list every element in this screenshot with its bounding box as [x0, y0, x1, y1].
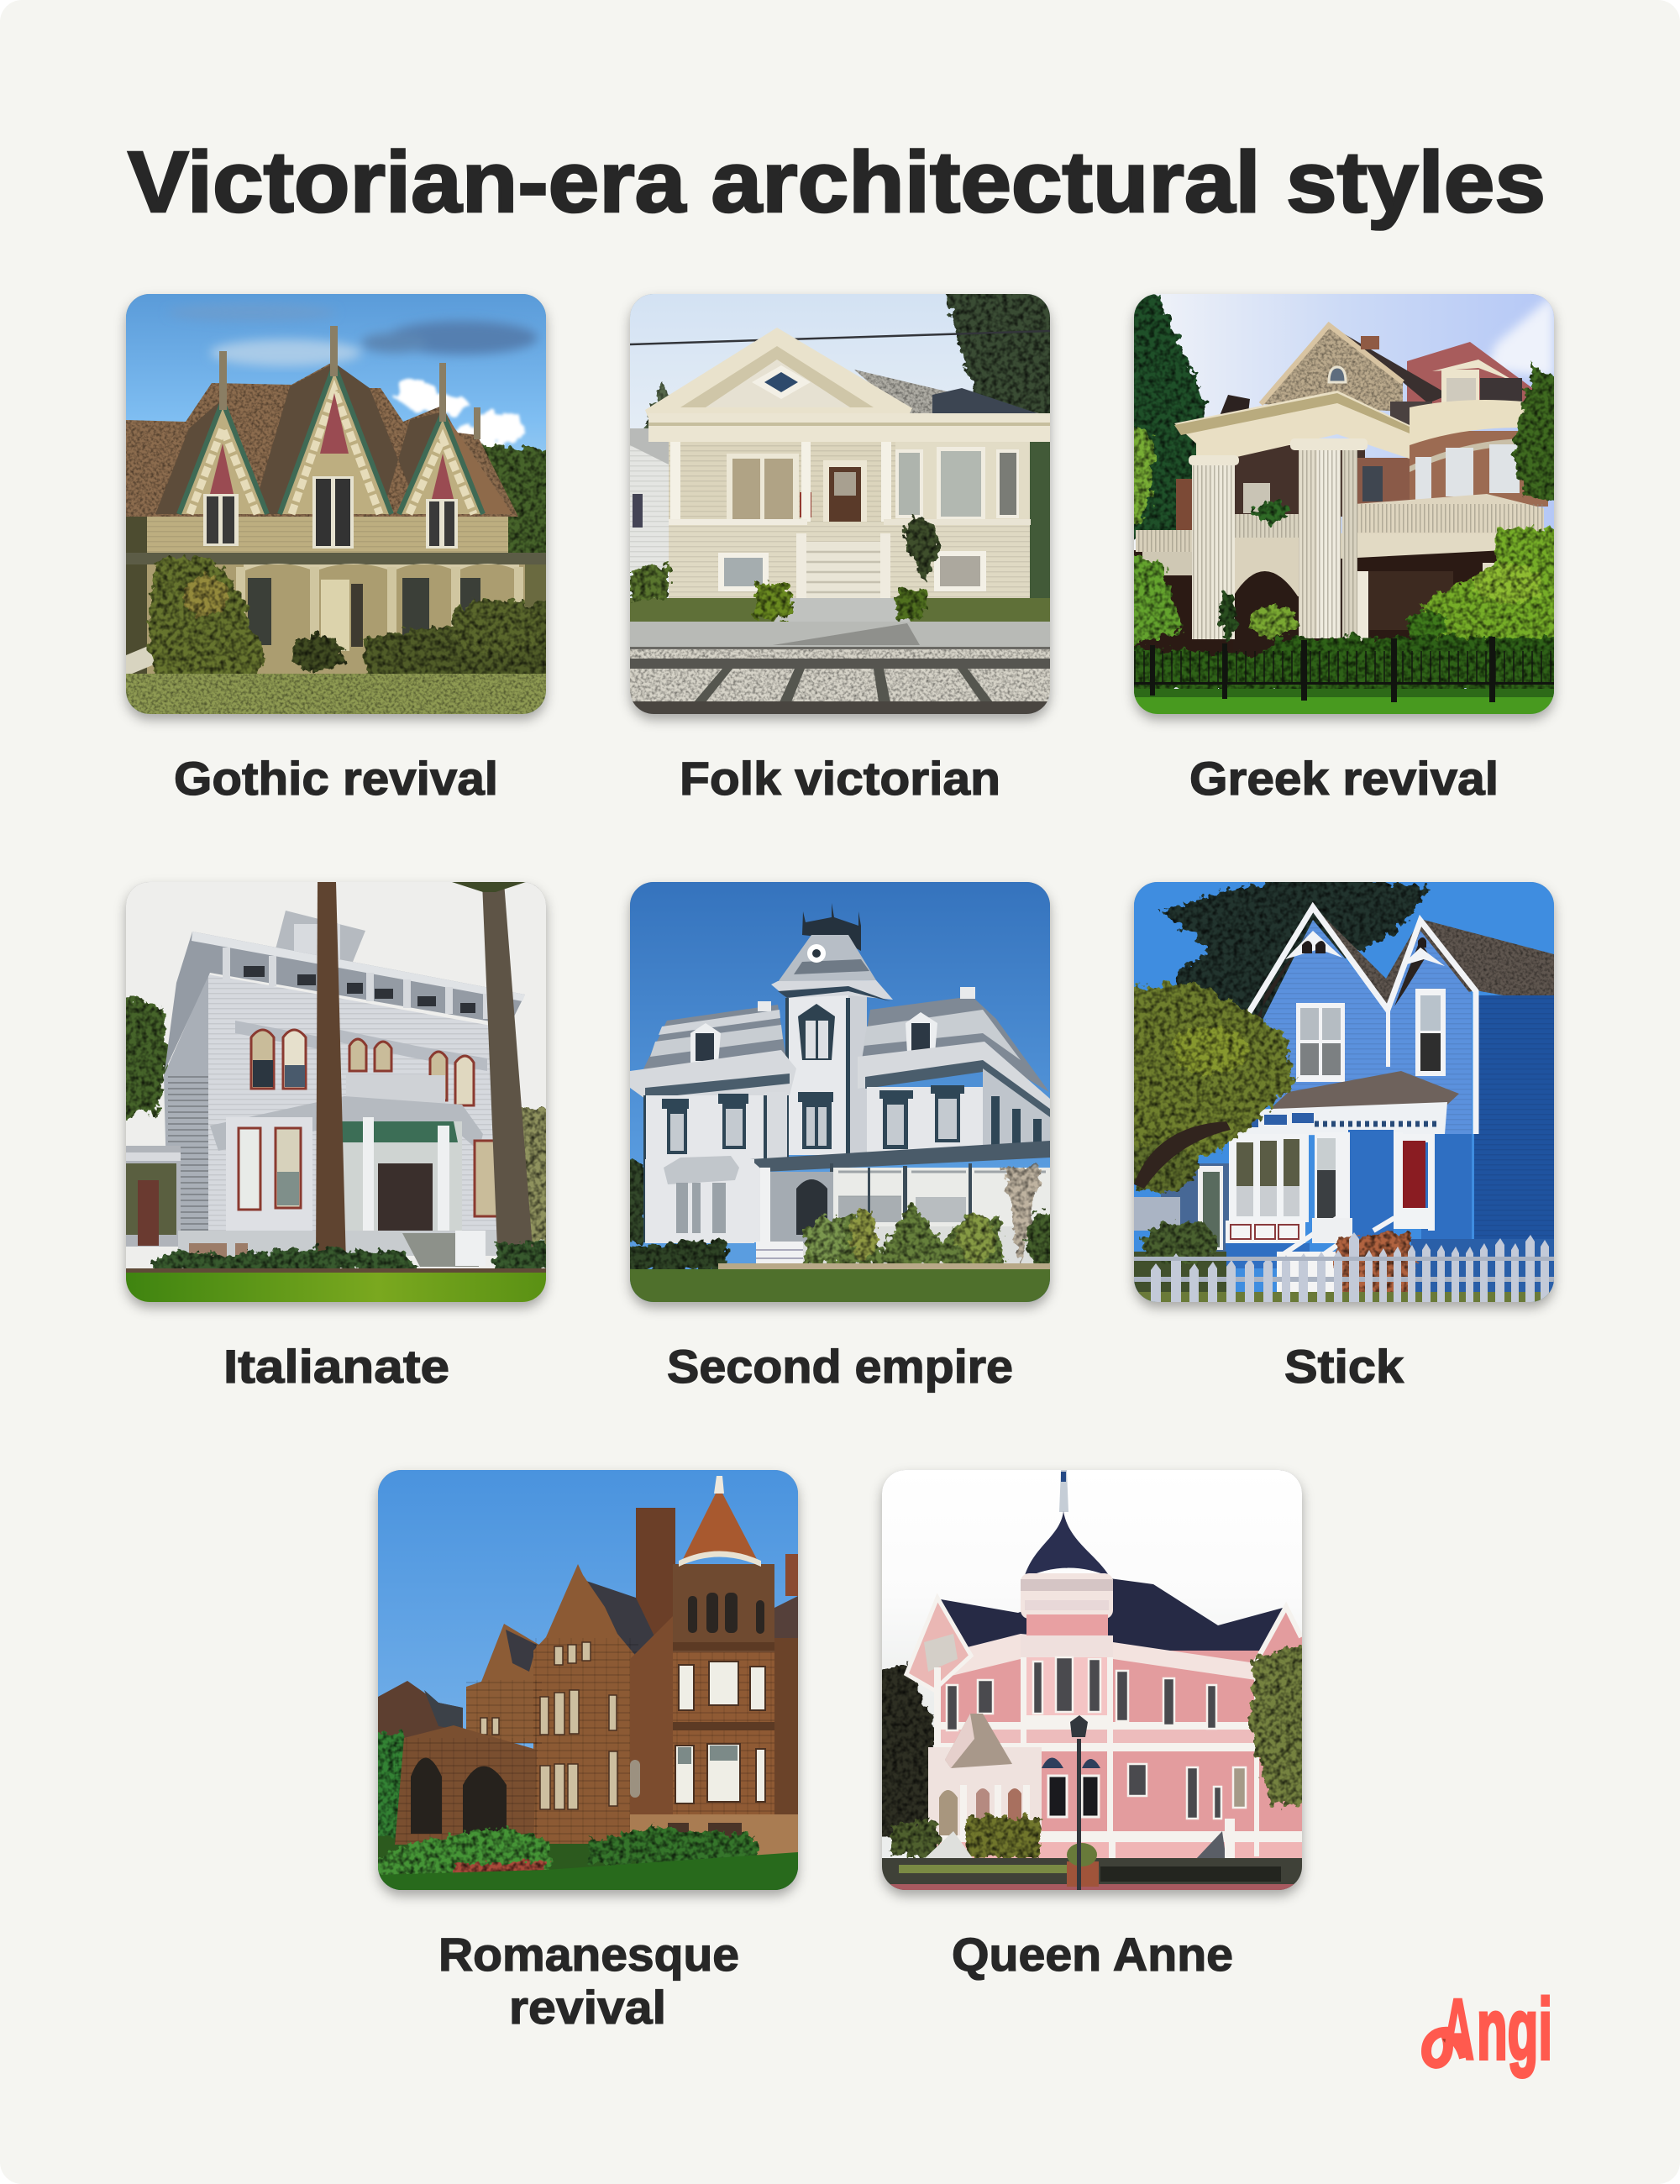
conical roof	[681, 1487, 759, 1562]
tower	[787, 991, 848, 1155]
upper windows	[235, 1021, 487, 1105]
label: Romanesque revival	[438, 1928, 739, 2034]
iron fence	[1134, 637, 1554, 702]
tree left	[1126, 290, 1205, 542]
porch body	[1348, 1130, 1394, 1243]
label: Greek revival: Greek revival	[1189, 752, 1499, 805]
ground fill	[378, 1831, 798, 1890]
label: Romanesque revival: Romanesque	[438, 1928, 739, 1981]
panel: Stick photo	[1121, 874, 1554, 1302]
stair rails	[1281, 1216, 1394, 1273]
main roof	[126, 362, 518, 517]
lower wall	[669, 522, 1030, 599]
hedges	[756, 584, 926, 620]
gable vent	[752, 365, 811, 399]
entablature	[1174, 391, 1410, 466]
flowers	[1336, 1231, 1415, 1294]
lawn	[126, 674, 546, 714]
logo: Angi	[1426, 1981, 1552, 2077]
label: Romanesque revival: revival	[509, 1981, 666, 2034]
background building	[378, 1681, 463, 1747]
upper windows	[1296, 989, 1446, 1082]
hillside	[481, 444, 546, 553]
neighbour house	[630, 445, 669, 571]
entablature	[648, 413, 1050, 442]
main windows	[480, 1642, 617, 1809]
columns	[1192, 441, 1495, 643]
balconies	[1136, 494, 1544, 552]
rose bush	[903, 517, 939, 584]
left tree	[370, 1732, 404, 1840]
main roof	[941, 1578, 1286, 1663]
panel: Second empire photo	[622, 882, 1060, 1302]
annex	[126, 1146, 181, 1247]
side wall	[164, 974, 210, 1252]
lawn	[378, 1852, 798, 1890]
label: Folk victorian: Folk victorian	[680, 752, 1000, 805]
main gable	[533, 1564, 638, 1844]
clouds	[396, 380, 525, 447]
balcony	[346, 1075, 445, 1107]
tower windows	[675, 1662, 765, 1803]
upper walls	[669, 442, 895, 522]
cupola	[276, 911, 365, 962]
foliage	[1126, 365, 1562, 647]
upper gable	[1407, 342, 1538, 407]
light blue walls	[1235, 920, 1472, 1134]
picket fence	[1134, 1232, 1554, 1302]
planter	[1067, 1861, 1099, 1887]
left side wall	[126, 517, 147, 674]
gable	[645, 328, 912, 418]
backing behind fence	[1411, 1239, 1554, 1294]
tower upper windows	[688, 1593, 764, 1634]
lower storey	[1134, 550, 1554, 668]
tower mansard	[778, 935, 876, 982]
porch windows	[833, 1168, 1050, 1226]
cornices	[630, 1050, 796, 1099]
porch base wall	[787, 1222, 1050, 1268]
finials	[219, 326, 480, 439]
tower	[673, 1564, 774, 1854]
windows	[947, 1657, 1221, 1819]
gables	[179, 365, 483, 514]
label: Queen Anne: Queen Anne	[952, 1928, 1233, 1981]
attic windows	[244, 966, 475, 1013]
label: Italianate: Italianate	[223, 1340, 449, 1393]
right background trees	[512, 1109, 554, 1243]
logo: Angi: A	[1441, 1981, 1474, 2077]
red door	[1403, 1141, 1425, 1208]
base and stairs	[178, 1231, 510, 1256]
porch	[147, 554, 525, 674]
dormer	[1441, 370, 1479, 410]
panel: Italianate photo	[118, 882, 554, 1302]
wing windows	[1415, 444, 1520, 501]
porch	[340, 1121, 462, 1231]
rail bed	[630, 647, 1050, 702]
plants	[151, 1243, 554, 1273]
windows	[662, 1085, 1042, 1154]
side roof	[854, 370, 1039, 413]
panel: Romanesque revival photo	[370, 1470, 802, 1890]
stone base	[630, 1814, 798, 1856]
shrubs	[370, 1827, 756, 1877]
conifer	[1159, 874, 1432, 1033]
background trees	[874, 1663, 937, 1840]
panel: Gothic revival photo	[126, 294, 554, 714]
shrubs	[622, 1168, 1060, 1273]
palm left	[118, 995, 168, 1126]
dormers	[690, 1012, 937, 1063]
bands	[934, 1715, 1302, 1842]
porch	[395, 1725, 537, 1845]
lawn	[126, 1271, 546, 1302]
finial	[1059, 1470, 1068, 1512]
right wall	[630, 1613, 676, 1844]
shrubs	[148, 557, 554, 689]
left tree	[1121, 983, 1294, 1265]
lawn	[630, 598, 1050, 623]
entry	[764, 1172, 833, 1243]
panel: Queen Anne photo	[874, 1470, 1310, 1890]
shrubs	[892, 1816, 1040, 1858]
label: Gothic revival: Gothic revival	[174, 752, 498, 805]
windows	[727, 447, 1019, 521]
brick wing	[1410, 431, 1548, 507]
side building	[1161, 1163, 1232, 1264]
title: Victorian-era architectural styles	[128, 134, 1546, 230]
facade	[208, 974, 510, 1239]
label: Stick: Stick	[1284, 1340, 1404, 1393]
columns	[670, 442, 891, 522]
dark roofs	[586, 1581, 655, 1659]
door	[823, 460, 867, 522]
lamp post	[1070, 1715, 1088, 1890]
panel: Greek revival photo	[1126, 290, 1562, 714]
tower crest	[802, 903, 861, 951]
lawn	[630, 1269, 1050, 1302]
porch rail	[1403, 1208, 1435, 1229]
panels	[1226, 1221, 1305, 1243]
entry porch	[928, 1747, 1042, 1835]
logo: Angi: ngi	[1477, 1981, 1552, 2077]
ground	[882, 1858, 1302, 1890]
hedge	[1126, 637, 1562, 693]
lawn	[1134, 1292, 1554, 1302]
left gable	[906, 1598, 971, 1690]
portico interior	[1222, 445, 1365, 517]
lower bay	[645, 1159, 754, 1243]
white barge boards	[1239, 907, 1476, 1134]
right tree	[1252, 1642, 1310, 1806]
palm trunks	[316, 882, 346, 1264]
tower	[1024, 1511, 1110, 1578]
right mansard	[861, 996, 1049, 1092]
bay windows	[226, 1117, 312, 1231]
chimneys	[636, 1508, 675, 1638]
porch frieze	[1231, 1102, 1447, 1136]
gable windows	[203, 476, 458, 549]
porch roof	[750, 1141, 1050, 1172]
side steps	[1194, 1831, 1226, 1861]
lawn	[1134, 690, 1554, 714]
left mansard	[639, 1005, 787, 1078]
stairs	[796, 533, 890, 605]
eave shadows	[1252, 932, 1428, 1029]
dark wing	[1474, 995, 1554, 1243]
label: Second empire: Second empire	[667, 1340, 1013, 1393]
pink body	[934, 1651, 1302, 1861]
panel: Folk victorian photo	[630, 286, 1058, 714]
walls	[645, 1095, 765, 1242]
white trim	[934, 1657, 1259, 1861]
porch roof	[1268, 1071, 1459, 1110]
second gable	[466, 1624, 542, 1743]
trees	[946, 294, 1050, 413]
main roofs	[1313, 906, 1554, 1010]
right gable	[1254, 1607, 1302, 1688]
wall	[147, 517, 508, 553]
sidewalk	[630, 622, 1050, 647]
cornice	[165, 932, 525, 1071]
